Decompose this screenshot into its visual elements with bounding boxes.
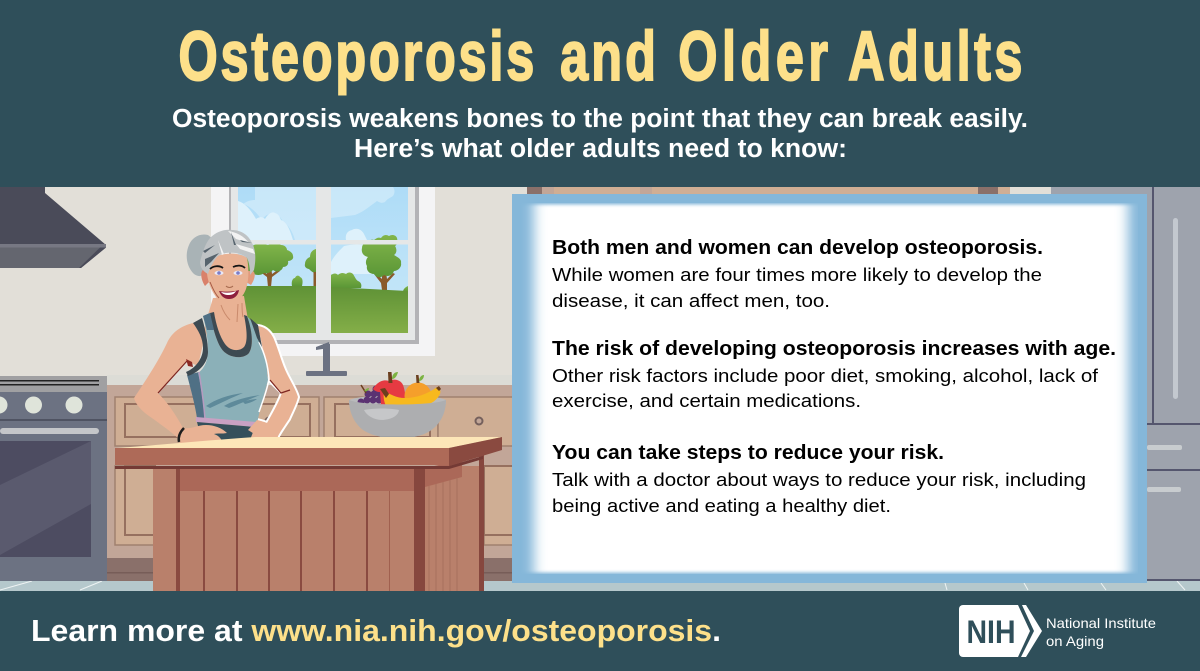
straps xyxy=(186,318,208,376)
hair bun xyxy=(187,235,214,276)
learn more link: Learn more at www.nia.nih.gov/osteoporosis . xyxy=(31,613,721,648)
subtitle: Osteoporosis weakens bones to the point that they can break easily. xyxy=(172,105,1028,133)
point 3: Talk with a doctor about ways to reduce your risk, including xyxy=(552,469,1086,490)
point 1: disease, it can affect men, too. xyxy=(552,290,830,311)
right arm xyxy=(248,326,298,438)
stove xyxy=(0,376,107,581)
point 3 xyxy=(552,441,1086,516)
title: and xyxy=(560,17,656,95)
point 3: being active and eating a healthy diet. xyxy=(552,495,891,516)
tank top xyxy=(198,313,268,424)
neckline trim xyxy=(210,312,252,357)
title: Osteoporosis xyxy=(179,17,534,95)
banana xyxy=(384,387,440,406)
footer band xyxy=(0,591,1200,671)
nose xyxy=(226,286,233,288)
countertop xyxy=(115,437,502,469)
range hood xyxy=(0,187,106,268)
title: Older xyxy=(678,17,828,95)
point 2: The risk of developing osteoporosis increases with age. xyxy=(552,337,1116,360)
lower cabinets xyxy=(107,385,524,581)
subtitle: Here’s what older adults need to know: xyxy=(354,135,847,163)
island body xyxy=(153,466,483,591)
apple xyxy=(373,380,405,405)
point 1 xyxy=(552,236,1043,311)
point 3: You can take steps to reduce your risk. xyxy=(552,441,944,464)
title xyxy=(179,17,1022,95)
grass xyxy=(240,286,316,333)
trees xyxy=(244,235,408,292)
face xyxy=(207,254,248,306)
waistband xyxy=(196,417,256,427)
refrigerator xyxy=(1051,187,1200,581)
fruit bowl xyxy=(349,372,446,443)
point 2: Other risk factors include poor diet, smoking, alcohol, lack of xyxy=(552,365,1099,386)
subtitle xyxy=(172,105,1028,163)
backsplash xyxy=(107,375,512,386)
grapes xyxy=(358,386,384,406)
faucet xyxy=(306,342,347,376)
window xyxy=(211,187,435,356)
header band xyxy=(0,0,1200,187)
clouds xyxy=(238,187,394,274)
upper cabinets xyxy=(527,187,1010,195)
kitchen scene xyxy=(0,187,1200,591)
hair top xyxy=(200,230,255,275)
orange xyxy=(404,382,432,410)
smile xyxy=(219,290,239,299)
NIH logo: NIH xyxy=(966,614,1016,650)
NIH logo xyxy=(959,605,1042,657)
wall xyxy=(0,187,1200,377)
mullions xyxy=(316,187,331,333)
woman xyxy=(134,230,298,447)
point 2: exercise, and certain medications. xyxy=(552,390,861,411)
eyes and brows xyxy=(210,266,245,275)
pants xyxy=(197,422,255,444)
kitchen island xyxy=(153,455,484,591)
point 2 xyxy=(552,337,1116,411)
point 1: Both men and women can develop osteoporosis. xyxy=(552,236,1043,259)
left arm xyxy=(134,323,228,446)
institute name: National Institute xyxy=(1046,615,1156,631)
neck and chest xyxy=(204,296,256,362)
hands xyxy=(180,425,227,447)
institute name xyxy=(1046,615,1156,649)
text card xyxy=(512,194,1147,583)
institute name: on Aging xyxy=(1046,633,1104,649)
ears xyxy=(201,270,209,286)
stove knobs xyxy=(0,396,82,414)
bowl body xyxy=(349,400,446,438)
side panel xyxy=(187,372,205,419)
bracelet xyxy=(179,428,184,442)
title: Adults xyxy=(848,17,1022,95)
floor xyxy=(0,580,1200,591)
bowl back rim xyxy=(349,396,446,404)
point 1: While women are four times more likely to develop the xyxy=(552,264,1042,285)
tank folds xyxy=(206,393,260,408)
